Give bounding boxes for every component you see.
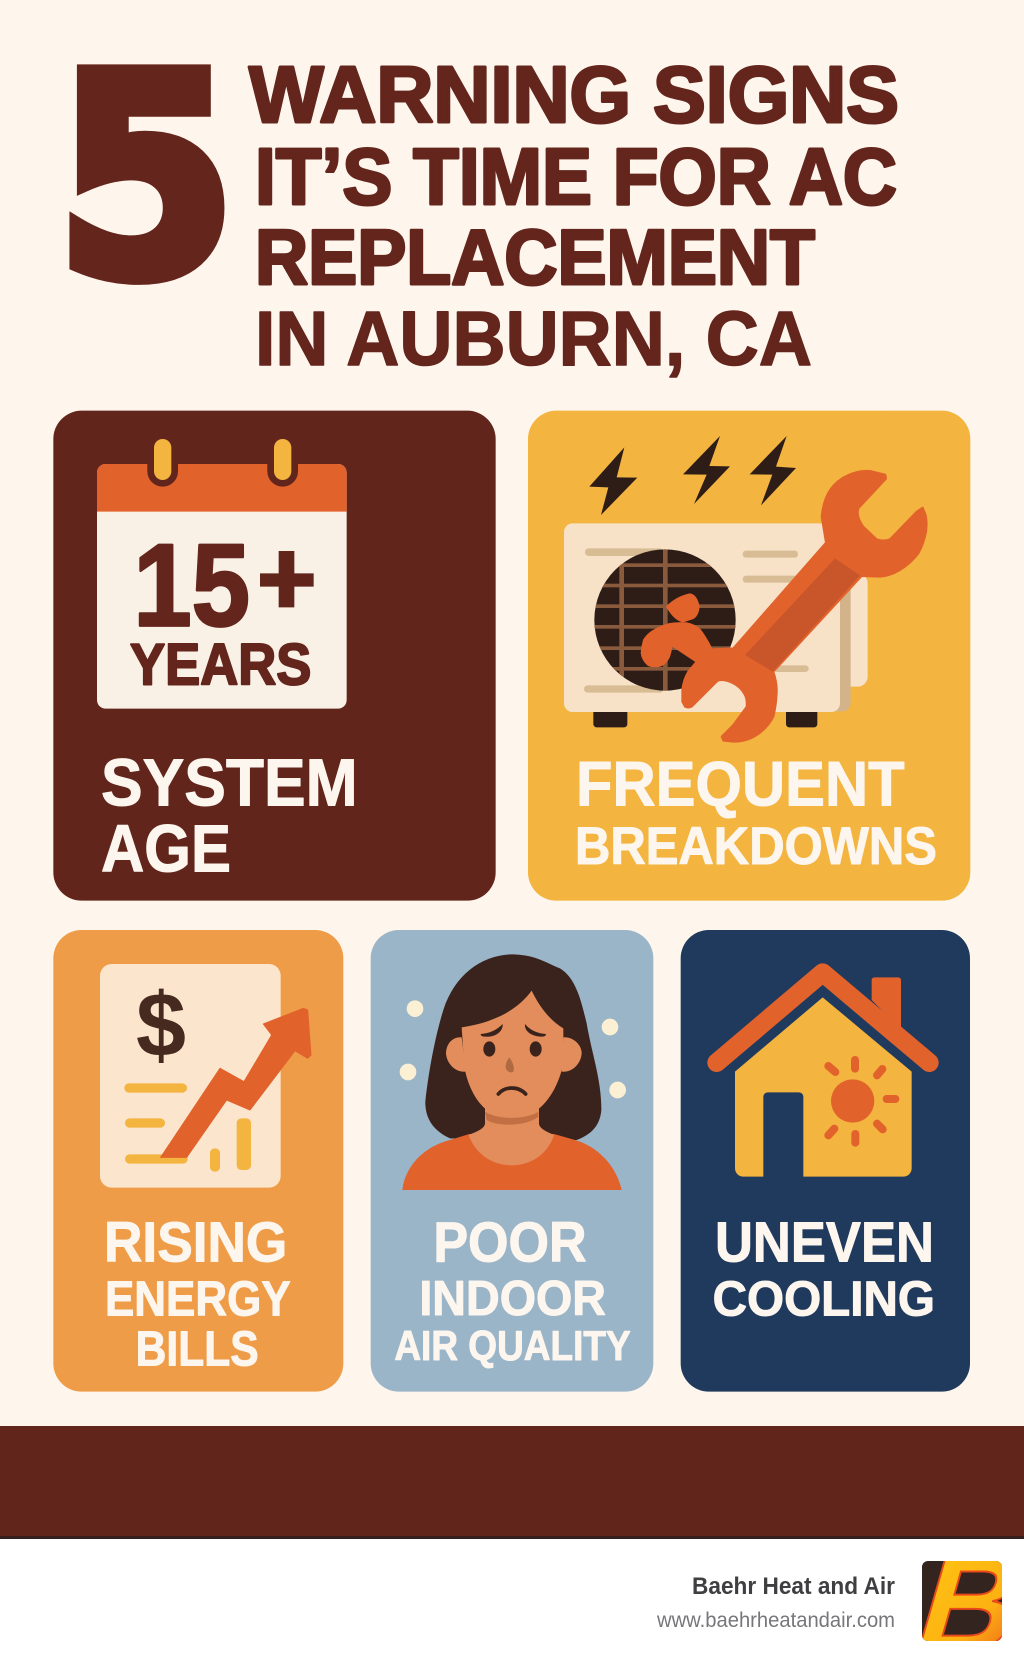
icon: calendar [97, 439, 347, 709]
icon: worried woman [402, 954, 622, 1190]
panel: rising energy bills [53, 930, 343, 1392]
icon: energy bill document [100, 964, 311, 1188]
heading line 2: IT’S TIME FOR AC [255, 132, 897, 221]
footer white area [0, 1539, 1024, 1666]
calendar plus sign [260, 551, 314, 607]
label: rising: RISING [104, 1212, 287, 1275]
panel: uneven cooling [681, 930, 970, 1392]
label: indoor: INDOOR [419, 1271, 606, 1326]
panel: poor indoor air quality [371, 930, 653, 1392]
label: system: SYSTEM [101, 746, 358, 820]
icon: dust particles [400, 1000, 626, 1098]
calendar number: 15 [133, 520, 250, 651]
dollar sign: $ [136, 975, 186, 1076]
heading line 4: IN AUBURN, CA [255, 296, 812, 382]
company website: www.baehrheatandair.com [656, 1609, 895, 1632]
label: poor: POOR [433, 1212, 587, 1275]
heading line 3: REPLACEMENT [255, 213, 815, 301]
icon: rising arrow [161, 1008, 311, 1157]
big number 5: 5 [56, 16, 236, 340]
footer band [0, 1426, 1024, 1539]
icon: wrench [642, 471, 927, 742]
icon: company logo [922, 1561, 1002, 1641]
label: uneven: UNEVEN [715, 1212, 934, 1275]
icon: ac unit [564, 523, 868, 727]
icon: house [717, 973, 929, 1177]
calendar years: YEARS [130, 632, 311, 697]
icon: sun [828, 1060, 895, 1143]
label: cooling: COOLING [713, 1271, 935, 1326]
panel: system age [53, 411, 496, 901]
label: breakdowns: BREAKDOWNS [575, 817, 937, 876]
label: frequent: FREQUENT [576, 749, 905, 819]
label: air quality: AIR QUALITY [394, 1322, 631, 1369]
title [56, 16, 899, 382]
label: energy: ENERGY [105, 1271, 291, 1326]
icon: lightning bolts [589, 436, 796, 515]
label: bills: BILLS [136, 1322, 259, 1377]
heading line 1: WARNING SIGNS [249, 50, 899, 139]
panel: frequent breakdowns [528, 411, 970, 901]
company name: Baehr Heat and Air [692, 1573, 895, 1600]
label: age: AGE [101, 812, 231, 886]
